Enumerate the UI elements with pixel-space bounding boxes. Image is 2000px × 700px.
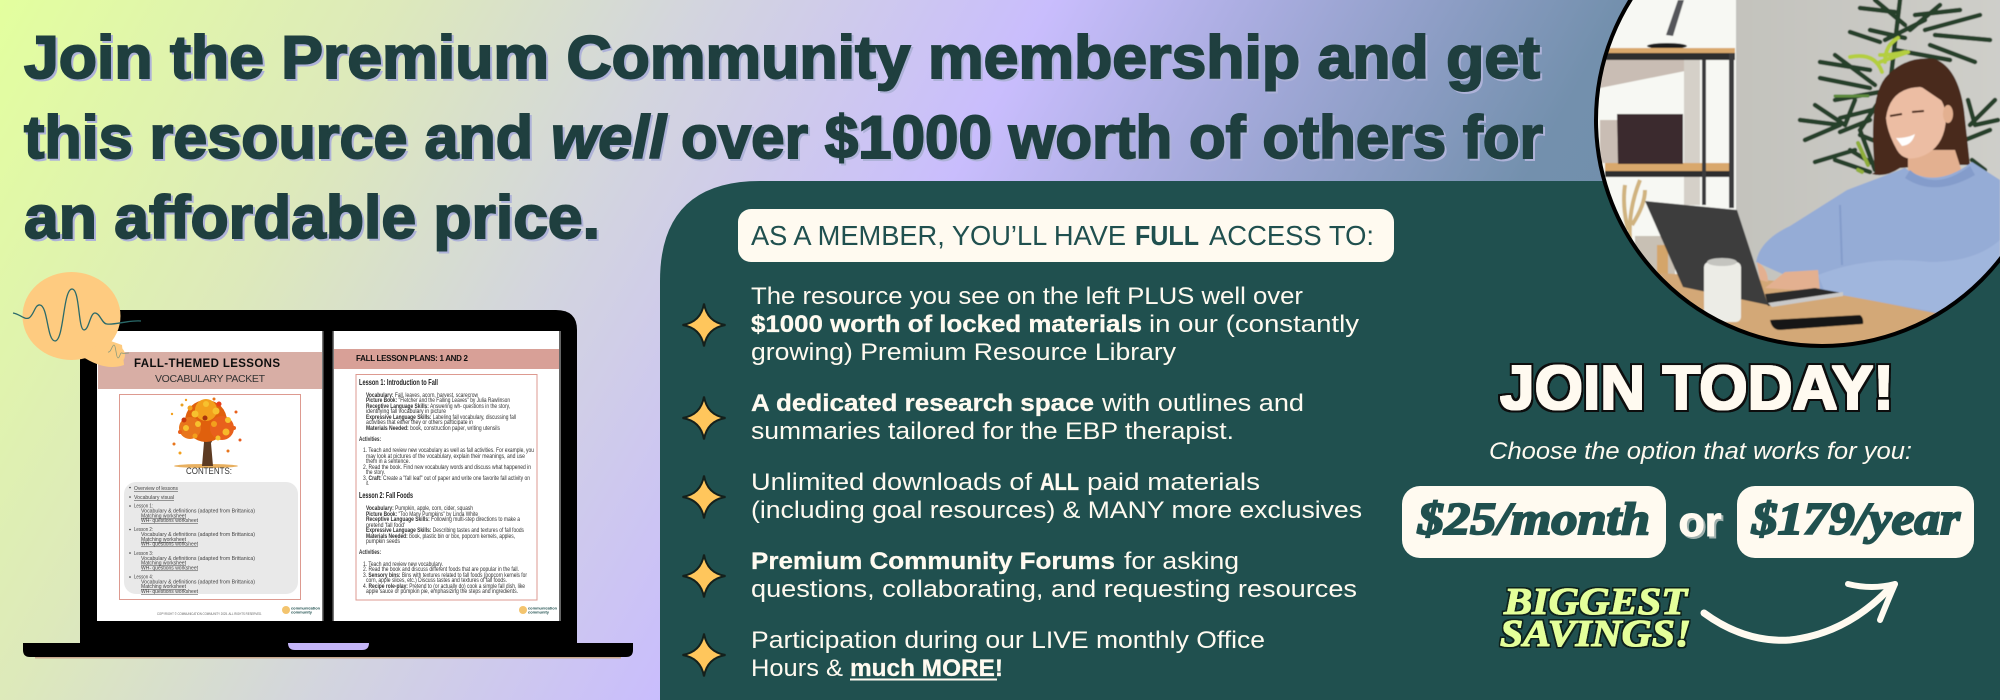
- benefit 4: Premium Community Forums: [751, 548, 1115, 575]
- benefit 1: $1000 worth of locked materials: [751, 311, 1142, 338]
- lesson plan text: 2. Read the book. Find new vocabulary words and discuss what happened in: [363, 464, 531, 471]
- right document page: community: [528, 610, 550, 614]
- left document page: CONTENTS:: [186, 466, 232, 476]
- photo ring: [1596, 0, 2000, 346]
- header pill: FULL: [1135, 220, 1199, 251]
- laptop mockup: [23, 310, 633, 658]
- lesson plan text: 1. Teach and review new vocabulary.: [363, 561, 443, 568]
- ear: [1943, 105, 1953, 123]
- icon: speech bubble with sound wave: [13, 272, 141, 367]
- table: [1661, 273, 1936, 344]
- icon: star: [682, 304, 726, 346]
- lesson plan text: 1. Teach and review new vocabulary as well as fall activities. For example, you: [363, 447, 534, 454]
- benefit 2: A dedicated research space: [751, 390, 1094, 417]
- contents list: Vocabulary & definitions (adapted from Brittanica): [141, 508, 255, 514]
- header pill: AS A MEMBER, YOU’LL HAVE: [751, 220, 1126, 251]
- lesson plan text: apple sauce or pumpkin pie, emphasizing the steps and ingredients.: [366, 588, 518, 595]
- phone: [1770, 315, 1863, 330]
- lesson plan text: Receptive Language Skills: Answering wh- questions in the story,: [366, 403, 510, 410]
- title: [24, 24, 1543, 251]
- lesson plan text: [359, 378, 534, 595]
- left document page: COPYRIGHT © COMMUNICATION COMMUNITY 2025. ALL RIGHTS RESERVED.: [157, 612, 262, 616]
- right page frame: [356, 374, 537, 600]
- price: yearly: [1737, 486, 1974, 558]
- header pill: [738, 209, 1394, 262]
- lesson plan text: pumpkin seeds: [366, 538, 401, 545]
- benefit 3: ALL: [1040, 469, 1079, 496]
- callout: biggest savings: SAVINGS!: [1500, 613, 1691, 655]
- icon: star: [682, 396, 726, 440]
- left document page: community: [291, 610, 313, 614]
- shelf shadow: [1600, 59, 1684, 88]
- contents list: WH- questions worksheet: [141, 566, 199, 572]
- lesson plan text: the story.: [366, 469, 385, 476]
- price: monthly: $25/month: [1417, 494, 1650, 544]
- lesson plan text: Lesson 1: Introduction to Fall: [359, 378, 438, 387]
- left document page: FALL-THEMED LESSONS: [134, 358, 280, 370]
- right document page: FALL LESSON PLANS: 1 AND 2: [356, 354, 469, 363]
- lesson plan text: activities that either they or others participate in: [366, 419, 473, 426]
- contents list: Vocabulary & definitions (adapted from Brittanica): [141, 580, 255, 586]
- contents list: Vocabulary & definitions (adapted from Brittanica): [141, 556, 255, 562]
- plant: [1800, 0, 1998, 172]
- lesson plan text: corn, apple slices, etc.) Discuss tastes and textures of fall foods.: [366, 577, 507, 584]
- contents list: Matching worksheet: [141, 584, 187, 590]
- lesson plan text: Expressive Language Skills: Labeling fall vocabulary, discussing fall: [366, 414, 516, 421]
- lamp: [1666, 0, 1684, 36]
- contents list: Lesson 4:: [134, 574, 153, 580]
- left page frame: [120, 394, 300, 600]
- lesson plan text: 2. Read the book and discuss different foods that are popular in the fall.: [363, 566, 519, 573]
- benefit 5: much MORE!: [850, 655, 1003, 682]
- contents list: Vocabulary & definitions (adapted from Brittanica): [141, 532, 255, 538]
- lesson plan text: 3. Craft: Create a "fall leaf" out of paper and write one favorite fall activity on: [363, 475, 530, 482]
- benefit 1: growing) Premium Resource Library: [751, 339, 1177, 366]
- lesson plan text: may look at pictures of the vocabulary, explain their meanings, and use: [366, 453, 525, 460]
- lesson plan text: Activities:: [359, 436, 381, 443]
- lesson plan text: 4. Recipe role-play: Pretend to (or actually do) cook a simple fall dish, like: [363, 583, 525, 590]
- benefit 4: [682, 548, 1357, 603]
- icon: star: [682, 476, 726, 518]
- contents list: Lesson 3:: [134, 551, 153, 557]
- or: or: [1678, 498, 1722, 545]
- left document page: communication: [291, 606, 321, 610]
- drink can: [1704, 258, 1741, 322]
- contents list: Overview of lessons: [134, 486, 178, 492]
- contents list: WH- questions worksheet: [141, 589, 199, 595]
- lesson plan text: Vocabulary: Pumpkin, apple, corn, cider, squash: [366, 505, 473, 512]
- benefit 2: with outlines and: [1101, 390, 1304, 417]
- laptop base: [23, 643, 633, 657]
- callout: biggest savings: [1500, 581, 1691, 655]
- right document page: [332, 331, 561, 621]
- title: Join the Premium Community membership and get: [24, 24, 1540, 91]
- contents list: Lesson 1:: [134, 504, 153, 510]
- panel: membership: [660, 181, 2000, 700]
- contents list: Matching worksheet: [141, 537, 187, 543]
- woman: [1756, 58, 2000, 313]
- callout: biggest savings: BIGGEST: [1503, 581, 1689, 623]
- lesson plan text: them in a sentence.: [366, 458, 410, 465]
- hands: [1757, 262, 1820, 292]
- arrow: [1704, 584, 1895, 640]
- lesson plan text: Picture Book: "Fletcher and the Falling Leaves" by Julia Rawlinson: [366, 397, 510, 404]
- face: [1886, 87, 1946, 159]
- laptop notch: [288, 643, 369, 650]
- contents list: Matching worksheet: [141, 514, 187, 520]
- shelves: [1605, 48, 1735, 53]
- lesson plan text: pretend 'fall food': [366, 522, 405, 529]
- benefit 3: Unlimited downloads of: [751, 469, 1032, 496]
- benefit 1: [682, 283, 1360, 366]
- benefit 3: paid materials: [1087, 469, 1260, 496]
- benefit 2: summaries tailored for the EBP therapist.: [751, 418, 1234, 445]
- storage box: [1617, 114, 1683, 164]
- icon: star: [682, 634, 726, 676]
- lesson plan text: Lesson 2: Fall Foods: [359, 491, 413, 500]
- benefit 5: Hours &: [751, 655, 843, 682]
- lesson plan text: it.: [366, 480, 369, 487]
- benefit 5: Participation during our LIVE monthly Office: [751, 627, 1265, 654]
- contents list: Lesson 2:: [134, 527, 153, 533]
- contents list: WH- questions worksheet: [141, 542, 199, 548]
- contents list: [124, 482, 298, 595]
- lesson plan text: Materials Needed: book, construction paper, writing utensils: [366, 425, 501, 432]
- autumn tree: [171, 398, 242, 468]
- left document page: VOCABULARY PACKET: [155, 373, 266, 385]
- photo: woman working on laptop: [1590, 0, 2000, 350]
- benefit 1: in our (constantly: [1149, 311, 1360, 338]
- title: this resource and: [24, 104, 533, 171]
- subheading: choose option: Choose the option that works for you:: [1489, 438, 1912, 465]
- benefit 1: The resource you see on the left PLUS well over: [751, 283, 1303, 310]
- contents list: WH- questions worksheet: [141, 518, 199, 524]
- left document page: [97, 331, 324, 621]
- heading: join today: JOIN TODAY!: [1500, 354, 1894, 423]
- contents list: Matching worksheet: [141, 560, 187, 566]
- laptop body: [80, 310, 577, 643]
- benefit 4: questions, collaborating, and requesting resources: [751, 576, 1357, 603]
- lesson plan text: Picture Book: "Too Many Pumpkins" by Linda White: [366, 511, 478, 518]
- benefit 5: [682, 627, 1265, 682]
- laptop: [1645, 201, 1768, 305]
- lesson plan text: identifying fall vocabulary in picture: [366, 408, 446, 415]
- lesson plan text: Receptive Language Skills: Following multi-step directions to make a: [366, 516, 520, 523]
- left page banner: [98, 352, 322, 389]
- right document page: communication: [528, 606, 558, 610]
- benefit 2: [682, 390, 1304, 445]
- price: yearly: $179/year: [1751, 494, 1961, 544]
- benefit 3: [682, 469, 1362, 524]
- title: over $1000 worth of others for: [681, 104, 1543, 171]
- price: monthly: [1402, 486, 1666, 558]
- header pill: ACCESS TO:: [1209, 220, 1374, 251]
- lesson plan text: Activities:: [359, 549, 381, 556]
- title: well: [551, 104, 667, 171]
- title: an affordable price.: [24, 184, 600, 251]
- lesson plan text: 3. Sensory bins: Bins with textures related to fall foods (popcorn kernels for: [363, 572, 528, 579]
- sweater: [1756, 162, 2000, 313]
- lesson plan text: Vocabulary: Fall, leaves, acorn, harvest, scarecrow: [366, 392, 478, 399]
- benefit 4: for asking: [1124, 548, 1239, 575]
- dried plant: [1624, 180, 1645, 240]
- right page banner: [334, 349, 559, 369]
- contents list: Vocabulary visual: [134, 495, 174, 501]
- benefit 3: (including goal resources) & MANY more exclusives: [751, 497, 1362, 524]
- icon: star: [682, 554, 726, 598]
- lesson plan text: Materials Needed: book, plastic bin or box, popcorn kernels, apples,: [366, 533, 515, 540]
- hair back: [1872, 58, 1970, 175]
- neck: [1908, 150, 1962, 182]
- lesson plan text: Expressive Language Skills: Describing tastes and textures of fall foods: [366, 527, 525, 534]
